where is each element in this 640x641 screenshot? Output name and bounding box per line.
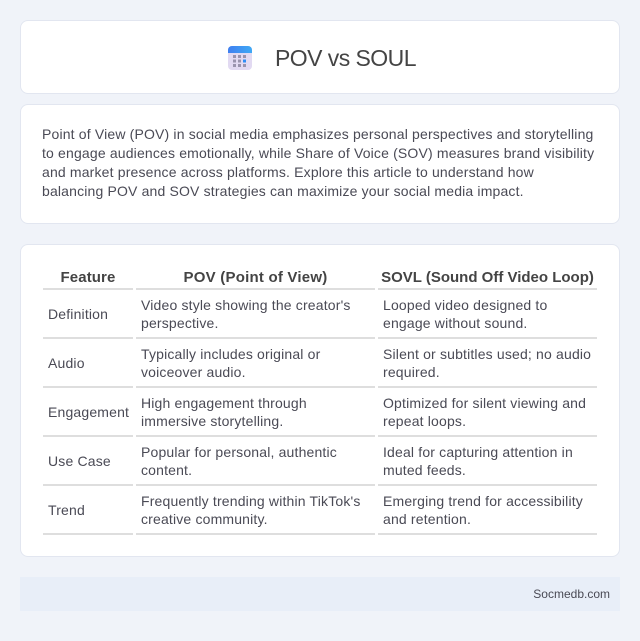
text block: introduction: Point of View (POV) in social media emphasizes personal perspectives and storytelling (42, 126, 593, 142)
icon: calendar (228, 46, 252, 70)
cell: SOVL use case: Ideal for capturing attention in (383, 444, 573, 460)
cell: POV use case: Popular for personal, authentic (141, 444, 337, 460)
footer text: Socmedb.com (533, 587, 610, 601)
row: Definition: Definition (48, 306, 108, 322)
cell: SOVL definition: Looped video designed to (383, 297, 547, 313)
text block: introduction: balancing POV and SOV strategies can maximize your social media impact. (42, 183, 524, 199)
table header: POV: POV (Point of View) (184, 268, 327, 286)
row: Use Case: Use Case (48, 453, 111, 469)
panel: title card (20, 20, 620, 94)
cell: SOVL definition (383, 297, 547, 331)
cell: POV trend: Frequently trending within TikTok's (141, 493, 360, 509)
cell: SOVL definition: engage without sound. (383, 315, 527, 331)
cell: POV definition: Video style showing the creator's (141, 297, 351, 313)
cell: SOVL audio: Silent or subtitles used; no audio (383, 346, 591, 362)
cell: POV trend: creative community. (141, 511, 268, 527)
cell: SOVL audio (383, 346, 591, 380)
row: Audio: Audio (48, 355, 85, 371)
cell: SOVL engagement: Optimized for silent viewing and (383, 395, 586, 411)
cell: SOVL trend (383, 493, 583, 527)
row: Engagement: Engagement (48, 404, 129, 420)
panel: comparison table (20, 244, 620, 557)
cell: POV audio (141, 346, 320, 380)
cell: SOVL engagement: repeat loops. (383, 413, 466, 429)
table header: SOVL: SOVL (Sound Off Video Loop) (381, 268, 594, 286)
text block: introduction: to engage audiences emotionally, while Share of Voice (SOV) measures brand visibility (42, 145, 594, 161)
text block: introduction: and market presence across platforms. Explore this article to understand how (42, 164, 534, 180)
cell: SOVL trend: Emerging trend for accessibility (383, 493, 583, 509)
title: POV vs SOUL (275, 45, 416, 71)
table header: Feature: Feature (61, 268, 115, 286)
cell: SOVL use case: muted feeds. (383, 462, 466, 478)
cell: POV engagement (141, 395, 307, 429)
panel: introduction (20, 104, 620, 224)
footer bar (20, 577, 620, 611)
cell: POV definition: perspective. (141, 315, 219, 331)
cell: SOVL audio: required. (383, 364, 440, 380)
cell: POV engagement: immersive storytelling. (141, 413, 283, 429)
text block: introduction (42, 126, 594, 199)
cell: SOVL trend: and retention. (383, 511, 471, 527)
cell: POV use case (141, 444, 337, 478)
cell: POV use case: content. (141, 462, 192, 478)
cell: SOVL use case (383, 444, 573, 478)
cell: POV definition (141, 297, 351, 331)
cell: SOVL engagement (383, 395, 586, 429)
cell: POV engagement: High engagement through (141, 395, 307, 411)
cell: POV trend (141, 493, 360, 527)
cell: POV audio: Typically includes original or (141, 346, 320, 362)
cell: POV audio: voiceover audio. (141, 364, 246, 380)
row: Trend: Trend (48, 502, 85, 518)
